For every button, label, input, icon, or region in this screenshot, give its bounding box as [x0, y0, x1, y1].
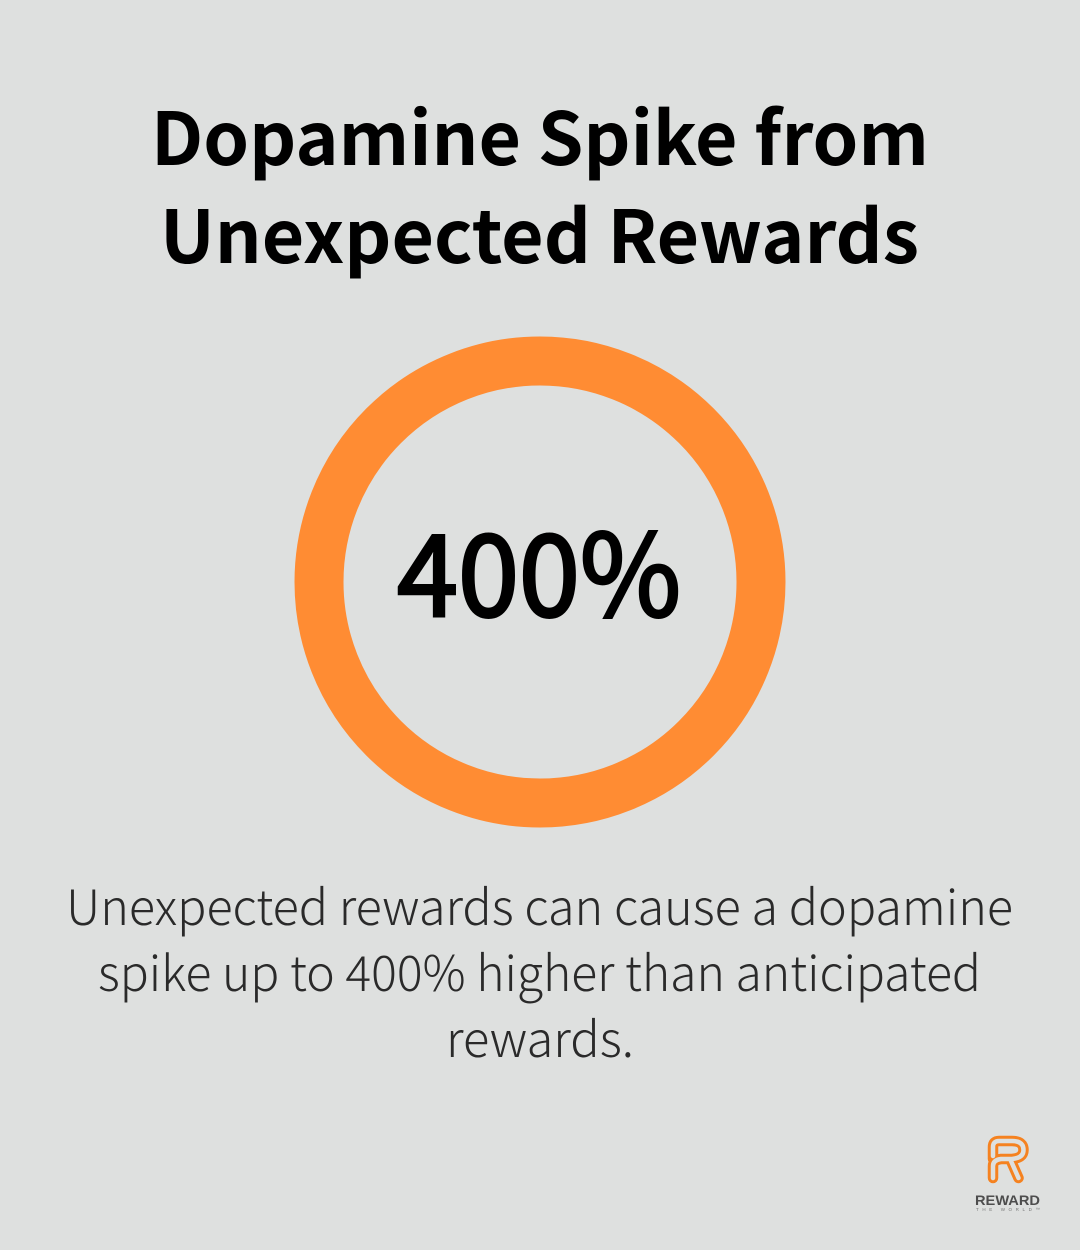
title: Dopamine Spike from — [151, 81, 929, 187]
title — [151, 81, 929, 285]
description text — [66, 869, 1013, 1072]
logo tagline: THE WORLD™ — [976, 1207, 1040, 1212]
icon: R mark — [993, 1141, 1024, 1178]
central statistic: 400% — [397, 485, 681, 649]
description text: spike up to 400% higher than anticipated — [98, 935, 981, 1006]
logo: Reward the World — [975, 1141, 1040, 1212]
donut ring — [319, 361, 761, 803]
title: Unexpected Rewards — [160, 179, 919, 285]
logo wordmark: REWARD — [975, 1192, 1040, 1208]
description text: rewards. — [446, 1001, 634, 1072]
description text: Unexpected rewards can cause a dopamine — [66, 869, 1013, 940]
